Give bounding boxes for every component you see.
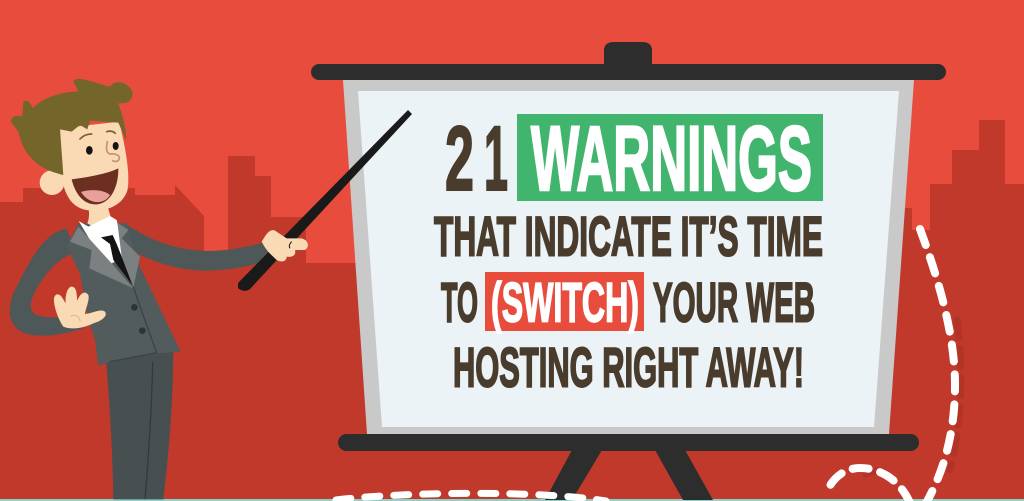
screen frame: [343, 80, 914, 434]
left lapel: [70, 227, 133, 288]
skyline right: [880, 120, 1024, 501]
pointing hand: [262, 230, 308, 261]
ear: [40, 170, 64, 195]
eyes: [86, 146, 93, 155]
trouser crease: [145, 362, 153, 499]
projector screen: [343, 80, 914, 434]
title: TO: [441, 270, 478, 334]
dashes right loop: [920, 229, 955, 501]
buttons: [131, 304, 138, 311]
presenter: [10, 79, 271, 499]
dashed path shadow: [866, 320, 961, 476]
title: [434, 108, 823, 398]
tie: [101, 235, 134, 287]
highlighted word: WARNINGS: [531, 108, 812, 210]
dashed arrow path: [336, 229, 955, 501]
face: [60, 122, 128, 211]
mouth: [72, 168, 118, 204]
raised arm sleeve: [10, 228, 83, 336]
nose: [107, 142, 119, 161]
switch word: (SWITCH): [491, 270, 639, 334]
neck: [87, 203, 113, 228]
jacket: [67, 223, 181, 366]
stand legs: [545, 450, 713, 500]
pointer stick: [238, 110, 412, 291]
shirt: [79, 216, 125, 263]
title number 2: 2: [445, 108, 474, 210]
tongue: [81, 190, 110, 202]
skyline left: [0, 156, 345, 501]
pointing arm sleeve: [123, 223, 271, 271]
screen surface: [358, 91, 899, 427]
hand crease: [71, 315, 80, 322]
dashes bottom arc: [336, 493, 606, 501]
ground: [0, 263, 1024, 501]
title: 1: [484, 108, 508, 210]
trousers: [105, 343, 173, 499]
right lapel: [117, 223, 140, 287]
jacket seam: [110, 287, 157, 362]
brows: [80, 131, 115, 139]
title line 3 end: YOUR WEB: [653, 270, 815, 334]
red highlight: [485, 272, 644, 331]
hair: [11, 79, 133, 175]
projector screen stand: [311, 42, 946, 500]
top knob: [604, 42, 652, 66]
dashes small loop: [827, 468, 910, 501]
bottom strip: [0, 499, 1024, 501]
bottom bar: [338, 434, 919, 451]
green highlight: [517, 114, 823, 201]
top bar: [311, 64, 946, 80]
lower hand: [54, 287, 106, 328]
